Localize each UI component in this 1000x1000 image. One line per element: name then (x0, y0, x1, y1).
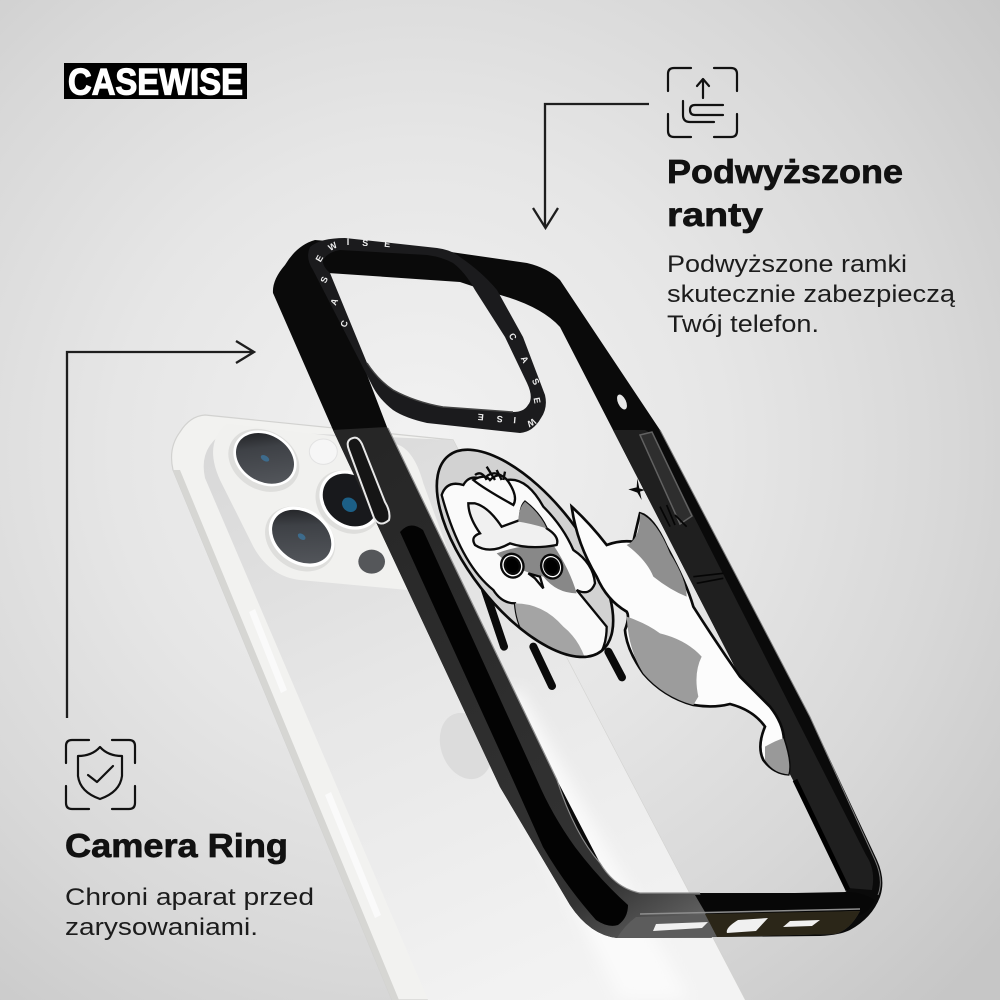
lens three (303, 457, 394, 547)
ring lettering: W (525, 416, 538, 429)
oval mirror (405, 421, 645, 686)
cat illustration (405, 421, 789, 774)
ring lettering: S (530, 377, 541, 387)
text: camera ring description: zarysowaniami. (65, 914, 258, 941)
phone side buttons (249, 609, 381, 918)
brand logo: CASEWISE (68, 62, 243, 102)
oval outline (405, 421, 645, 686)
icon: shield with check (66, 740, 135, 809)
arrow to raised edges (533, 104, 649, 228)
ring lettering (314, 237, 542, 429)
ring lettering: E (477, 412, 484, 422)
text: camera ring description (65, 884, 314, 941)
ring lettering: W (326, 240, 339, 253)
phone body (172, 415, 745, 1000)
right case bar shading (613, 393, 880, 895)
cat eyes (500, 552, 525, 579)
ring lettering: S (496, 414, 503, 424)
ring lettering: I (347, 237, 349, 247)
bottom edge of case with ports (617, 892, 875, 938)
camera ring (308, 237, 546, 433)
lens one (217, 416, 311, 504)
heading: raised edges: Podwyższone (667, 153, 903, 190)
ring lettering: C (338, 318, 350, 329)
clear case frame (273, 240, 882, 938)
lens two (252, 493, 348, 585)
icon: raised edges (668, 68, 737, 137)
apple logo on phone (431, 705, 501, 787)
port cutouts (653, 918, 820, 933)
text: raised edges description (667, 251, 956, 338)
cat in mirror (442, 467, 607, 665)
ring lettering: E (314, 253, 325, 264)
volume button (348, 438, 390, 524)
text: raised edges description: skutecznie zabezpieczą (667, 281, 956, 308)
ring lettering: A (519, 354, 531, 365)
heading: raised edges: ranty (667, 196, 764, 233)
ring lettering: A (328, 296, 340, 307)
sensor (358, 550, 385, 574)
walking cat (572, 507, 789, 774)
left case bar shading (333, 427, 712, 938)
text: raised edges description: Twój telefon. (667, 311, 819, 338)
ring lettering: C (507, 331, 519, 342)
text: raised edges description: Podwyższone ramki (667, 251, 907, 278)
ring lettering: E (384, 239, 391, 249)
camera module (213, 416, 463, 595)
ring lettering: E (532, 397, 542, 404)
text: camera ring description: Chroni aparat przed (65, 884, 314, 911)
cat legs (485, 590, 622, 686)
right side buttons (640, 432, 692, 524)
heading: camera ring: Camera Ring (65, 827, 288, 864)
ring lettering: S (362, 238, 369, 248)
ring lettering: I (513, 415, 516, 425)
sparkle and whiskers (628, 478, 645, 500)
heading: raised edges (667, 153, 903, 233)
arrow to camera ring (67, 341, 254, 718)
ring lettering: S (318, 275, 330, 285)
flash (309, 439, 337, 464)
